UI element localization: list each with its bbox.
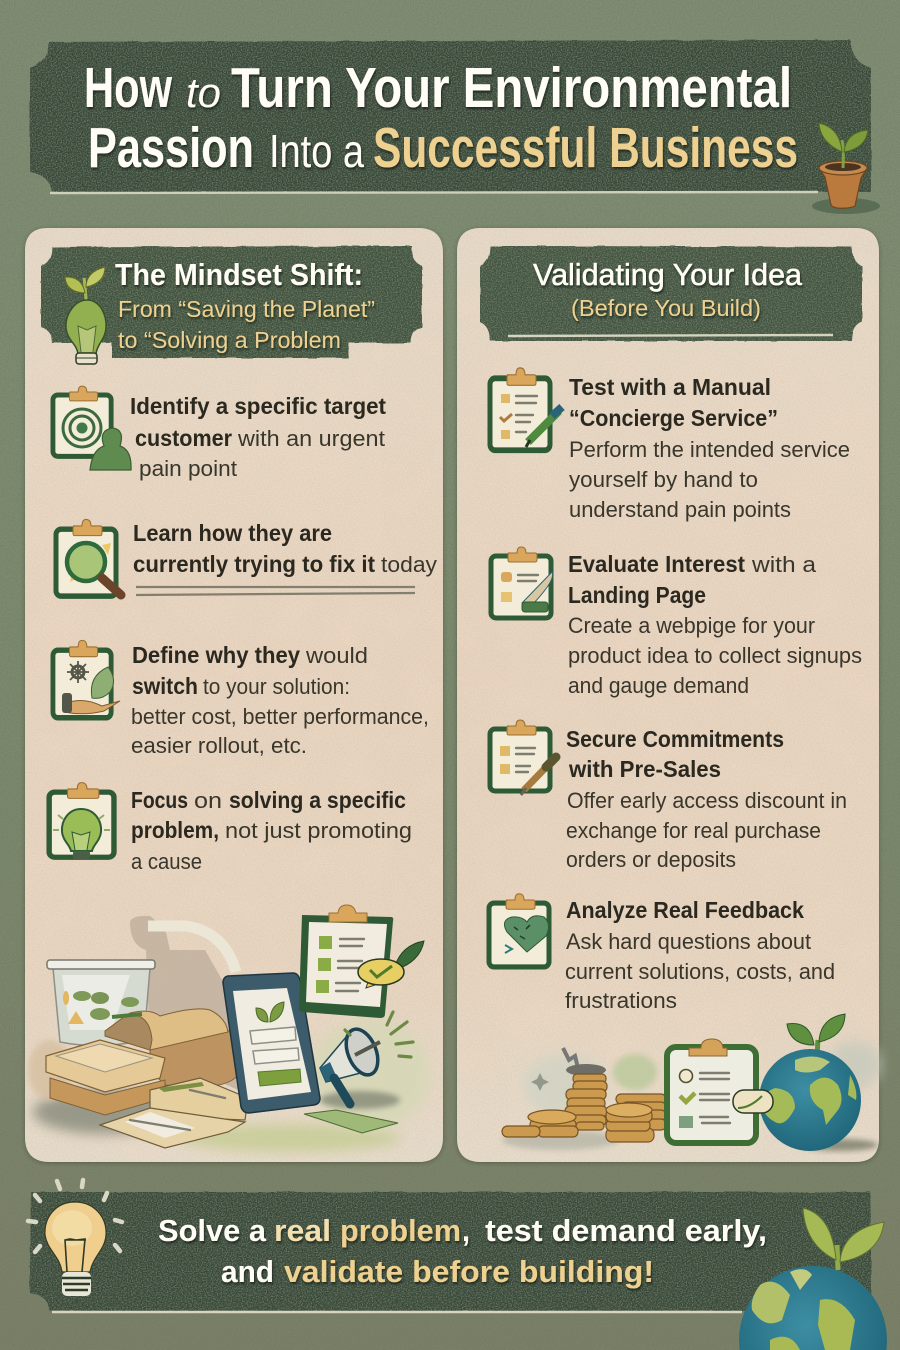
icon: potted sprout — [812, 123, 880, 214]
coal on coin stack — [563, 1048, 606, 1076]
title text: to — [186, 69, 221, 116]
item text: Create a webpige for your — [568, 613, 815, 638]
footer text: and — [221, 1254, 274, 1289]
header text: From “Saving the Planet” — [118, 296, 375, 322]
panel texture — [457, 228, 879, 1162]
item: current fix — [56, 519, 438, 596]
stacked food boxes — [46, 1040, 165, 1115]
item text: on — [194, 788, 222, 813]
header text — [533, 257, 803, 321]
glass container — [47, 960, 155, 1046]
washes — [502, 1041, 881, 1151]
item text: Analyze Real Feedback — [566, 897, 804, 923]
clipboard — [667, 1039, 756, 1143]
item text: would — [305, 643, 368, 668]
phone — [223, 973, 320, 1113]
item text: product idea to collect signups — [568, 643, 862, 668]
item text: with a — [751, 552, 817, 577]
item text: Landing Page — [568, 582, 706, 608]
item text: a cause — [131, 849, 202, 874]
item text: Offer early access discount in — [567, 788, 847, 813]
icon: pill label on clipboard — [733, 1090, 773, 1113]
item text: solving a specific — [229, 787, 406, 813]
item text: Secure Commitments — [566, 726, 784, 752]
item text: switch — [132, 673, 198, 699]
item text: easier rollout, etc. — [131, 733, 307, 758]
item text: problem, — [131, 817, 219, 843]
item text — [131, 787, 412, 874]
item text: to your solution: — [203, 674, 350, 699]
item text: currently trying to fix it — [133, 551, 375, 577]
footer text: test demand early, — [485, 1213, 767, 1248]
item text: orders or deposits — [566, 847, 736, 872]
header text: The Mindset Shift: — [115, 257, 363, 292]
icon: target and person — [53, 386, 131, 470]
panel texture — [25, 228, 443, 1162]
item text: Evaluate Interest — [568, 551, 745, 577]
item text — [566, 726, 847, 872]
item text: Ask hard questions about — [566, 929, 812, 954]
footer banner shape — [30, 1192, 871, 1311]
illustration: eco packaging and launch kit — [28, 905, 430, 1152]
item text: Learn how they are — [133, 520, 332, 546]
item: target customer — [53, 386, 386, 481]
item text: Define why they — [132, 642, 300, 668]
footer text: validate before building! — [284, 1254, 654, 1289]
panel: validating your idea — [457, 228, 881, 1162]
footer text: , — [462, 1213, 470, 1248]
item text: “Concierge Service” — [569, 405, 778, 431]
item: feedback — [489, 894, 835, 1013]
item text — [131, 642, 429, 758]
icon: megaphone — [320, 1012, 413, 1104]
item: solve a problem — [49, 783, 412, 874]
item text: customer — [135, 425, 232, 451]
item text: today — [381, 552, 438, 577]
icon: light bulb with rays — [28, 1180, 122, 1296]
stacked cards — [150, 1078, 248, 1120]
panel: mindset shift — [25, 228, 443, 1162]
item text: with an urgent — [237, 426, 386, 451]
item text: current solutions, costs, and — [565, 959, 835, 984]
item text: Perform the intended service — [569, 437, 850, 462]
coin stacks — [502, 1074, 666, 1142]
footer text: Solve a — [158, 1213, 267, 1248]
icon: globe with sprout — [739, 1208, 887, 1350]
footer text — [158, 1213, 767, 1289]
item text: understand pain points — [569, 497, 791, 522]
title text: How — [84, 56, 172, 120]
flat green card — [304, 1110, 398, 1133]
panel header — [480, 246, 862, 341]
header banner shape — [41, 246, 422, 358]
footer underline — [52, 1311, 742, 1313]
title text: Turn Your Environmental — [231, 56, 792, 120]
icon: checklist and pen — [490, 368, 562, 450]
item text — [568, 551, 862, 698]
item text — [130, 393, 386, 481]
bottom banner — [28, 1180, 887, 1350]
header banner shape — [480, 246, 862, 341]
header text: Validating Your Idea — [533, 257, 803, 292]
panel background — [457, 228, 879, 1162]
item text: and gauge demand — [568, 673, 749, 698]
item text — [569, 374, 850, 522]
title banner — [30, 40, 871, 193]
icon: green heart — [489, 894, 549, 967]
item text: frustrations — [565, 988, 677, 1013]
footer text: problem — [340, 1213, 461, 1248]
item text: pain point — [139, 456, 238, 481]
icon: hand holding leaf — [53, 640, 120, 718]
item text: Test with a Manual — [569, 374, 771, 400]
icon: magnifying glass — [56, 519, 121, 596]
header text: to “Solving a Problem — [118, 327, 341, 353]
kraft box — [105, 1009, 238, 1087]
panel header — [41, 246, 422, 364]
panel background — [25, 228, 443, 1162]
header text — [115, 257, 375, 353]
header underline — [508, 335, 833, 336]
item: pre-sales — [490, 720, 847, 872]
jug — [130, 916, 238, 1090]
double underline — [136, 587, 415, 595]
globe and sprout — [759, 1014, 861, 1151]
footer text: real — [274, 1213, 331, 1248]
icon: bulb with sprout — [65, 267, 106, 364]
clipboard with checks — [299, 905, 393, 1018]
illustration: coins, checklist and globe — [502, 1014, 881, 1151]
item text — [133, 520, 438, 577]
icon: checklist and pencil — [490, 720, 556, 795]
icon: check bubble and leaf pen — [358, 941, 424, 988]
icon: form and quill — [491, 547, 553, 618]
item text — [565, 897, 835, 1013]
title banner shape — [30, 40, 871, 192]
item text: with Pre-Sales — [568, 756, 721, 782]
item text: Focus — [131, 787, 188, 813]
title text: Into a — [269, 125, 364, 177]
item: why switch — [53, 640, 429, 758]
title text: Passion — [88, 116, 254, 180]
header text: (Before You Build) — [571, 295, 761, 321]
flat leaflet — [100, 1108, 245, 1148]
item text: exchange for real purchase — [566, 818, 821, 843]
item: landing page — [491, 547, 862, 698]
item text: yourself by hand to — [569, 467, 758, 492]
item text: better cost, better performance, — [131, 704, 429, 729]
title text — [84, 56, 798, 180]
item: concierge — [490, 368, 850, 522]
ground washes — [28, 1020, 430, 1152]
item text: Identify a specific target — [130, 393, 386, 419]
item text: not just promoting — [225, 818, 412, 843]
icon: green bulb — [49, 783, 114, 859]
title underline — [50, 192, 818, 193]
